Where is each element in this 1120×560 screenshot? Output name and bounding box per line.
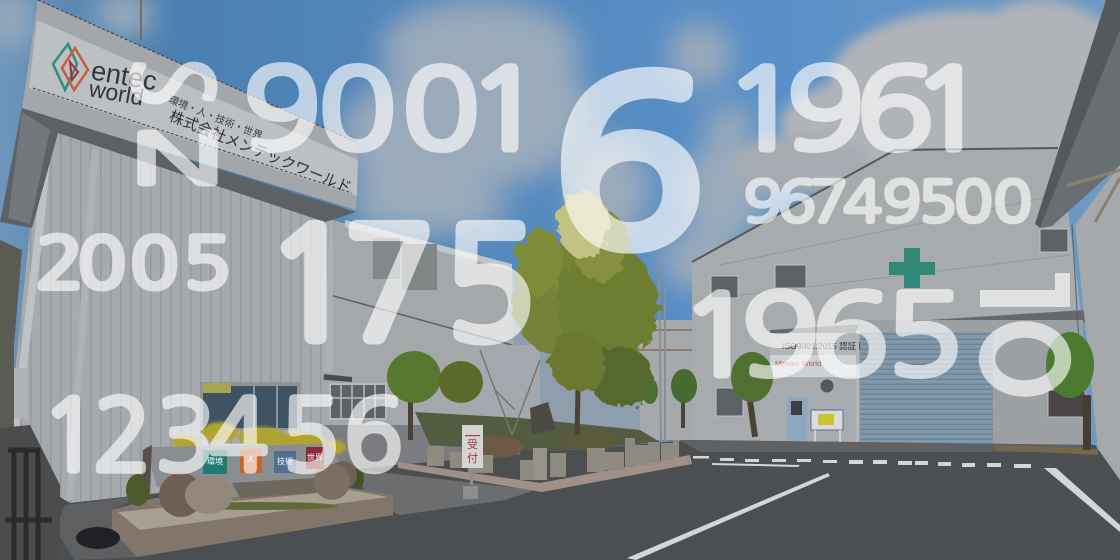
annex window [329,383,387,420]
building: rear left annex [314,218,540,470]
rear buildings behind tree [510,320,640,440]
notice board [811,410,843,444]
number: 1961: 1961 [724,55,988,165]
clouds [0,0,1120,290]
reception sign [462,425,483,499]
logo text: entec [89,55,159,96]
round mirror [820,380,834,392]
number: 1965: 1965 [679,281,963,391]
topiary trees [387,332,1094,450]
value plates [203,447,324,474]
rotated glyph: ring and bar [980,273,1070,388]
ISO certification board [770,333,874,377]
soffit [0,108,356,228]
office window [200,382,300,430]
logo mark [53,44,88,90]
reception sign: 受 [467,438,478,451]
monument with millstones [112,422,393,557]
garden: curb and stone blocks [398,402,692,492]
value plates: 環境 [207,456,223,466]
building: right factory [692,148,1085,446]
value plates: 技術 [277,456,293,466]
building: main left factory [0,0,358,503]
company name: 株式会社メンテックワールド [167,108,354,197]
tree: central large tree [480,192,658,435]
pale building behind tree [470,345,540,420]
value plates: 人 [247,455,255,464]
number: 9001: 9001 [243,55,545,165]
rotated glyph: upper S: S [118,58,223,107]
shrubs [126,474,150,506]
black lattice box [0,425,120,560]
number: 123456: 123456 [41,387,403,484]
overlaid numbers [36,52,1070,484]
ISO certification board: ISO9001:2015 認証取得 [782,341,874,351]
planter [112,488,393,557]
left edge foliage [0,240,22,470]
building: far right [1035,0,1120,482]
flag poles and rear building [632,262,692,445]
flowers [172,422,346,454]
number: 175: 175 [265,209,536,360]
monument stone [145,444,350,498]
number: 2005: 2005 [36,229,231,298]
rotated glyph: lower N: N [130,124,224,194]
logo text: world [86,75,146,110]
value plates: 世界 [307,452,323,462]
reception sign: 付 [467,452,478,465]
mast [140,0,142,40]
ISO certification board: Mentec World [775,359,821,368]
door [787,397,807,441]
millstones [329,461,357,489]
shutter [856,330,993,446]
number: 96749500: 96749500 [744,173,1032,230]
road markings [627,456,1120,560]
green cross [889,248,935,288]
downpipes [8,135,95,500]
sign fascia [22,0,358,210]
company motto: 環境・人・技術・世界 [167,93,264,142]
ground: pavement and road [55,440,1120,560]
windows [711,229,1068,416]
number: large 6: 6 [554,52,703,275]
